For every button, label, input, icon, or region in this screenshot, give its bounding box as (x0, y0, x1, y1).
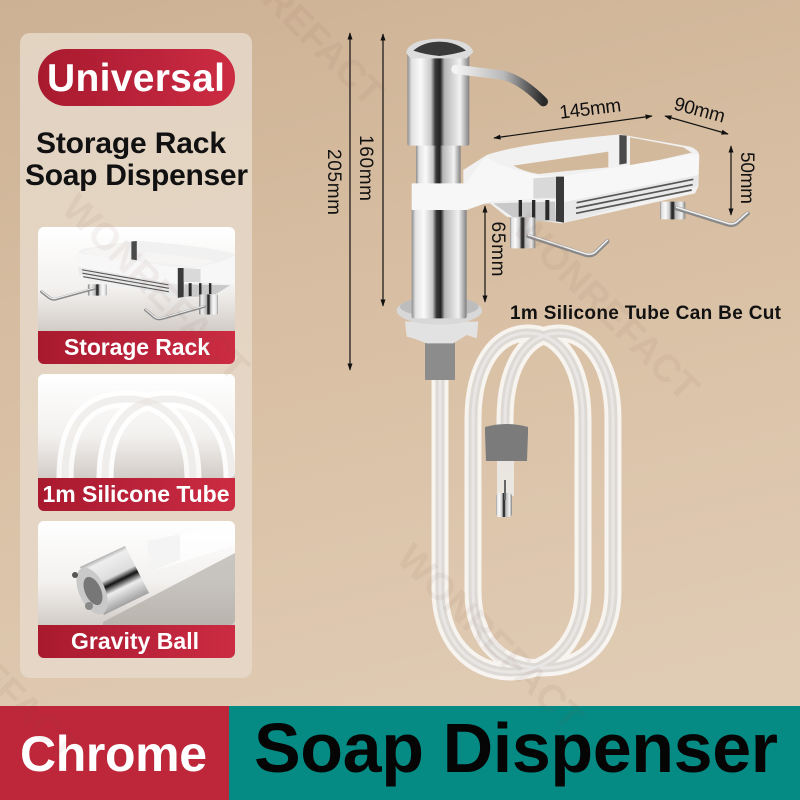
card: silicone tube (38, 374, 235, 511)
dimension labels: 145mm (558, 95, 622, 124)
card: storage rack (38, 227, 235, 364)
dimension arrows (350, 33, 731, 370)
banner: chrome (0, 706, 229, 800)
card: gravity ball (38, 521, 235, 658)
dimension labels: 50mm (736, 152, 757, 204)
neck (416, 143, 461, 185)
watermarks: WONREFACT (504, 207, 706, 410)
watermarks: WONREFACT (54, 187, 256, 390)
badge: Universal (38, 49, 235, 106)
dimension labels: 160mm (355, 135, 376, 201)
heading: storage rack soap dispenser: Soap Dispenser (25, 159, 248, 192)
dimension labels: 65mm (487, 222, 508, 276)
flange base (397, 297, 482, 343)
watermarks: WONREFACT (389, 537, 591, 740)
banner: chrome: Chrome (20, 726, 207, 782)
label: storage rack (38, 331, 235, 364)
soap pump (397, 39, 748, 380)
image: storage rack (40, 241, 235, 320)
upper body (407, 51, 469, 146)
banner: soap dispenser: Soap Dispenser (254, 709, 778, 787)
heading: storage rack soap dispenser: Storage Rack (36, 127, 226, 160)
label: gravity ball (38, 625, 235, 658)
dimension labels (323, 94, 757, 277)
panel: features (20, 33, 252, 678)
label: gravity ball: Gravity Ball (71, 628, 199, 654)
image: silicone tube (65, 399, 232, 478)
silicone tube coil (440, 333, 613, 672)
rack and hooks (412, 134, 748, 255)
image: gravity ball (70, 522, 235, 625)
thread (425, 340, 455, 380)
cap dome (406, 39, 473, 58)
caption: tube can be cut: 1m Silicone Tube Can Be Cut (510, 303, 782, 324)
spout (456, 69, 543, 102)
lower body (412, 207, 467, 318)
heading: storage rack soap dispenser (25, 127, 248, 192)
badge: Universal: Universal (47, 57, 225, 100)
label: storage rack: Storage Rack (64, 334, 210, 360)
dimension labels: 90mm (672, 94, 727, 128)
weight cap and filter (485, 424, 528, 517)
label: silicone tube: 1m Silicone Tube (42, 481, 230, 507)
dimension labels: 205mm (323, 149, 344, 215)
